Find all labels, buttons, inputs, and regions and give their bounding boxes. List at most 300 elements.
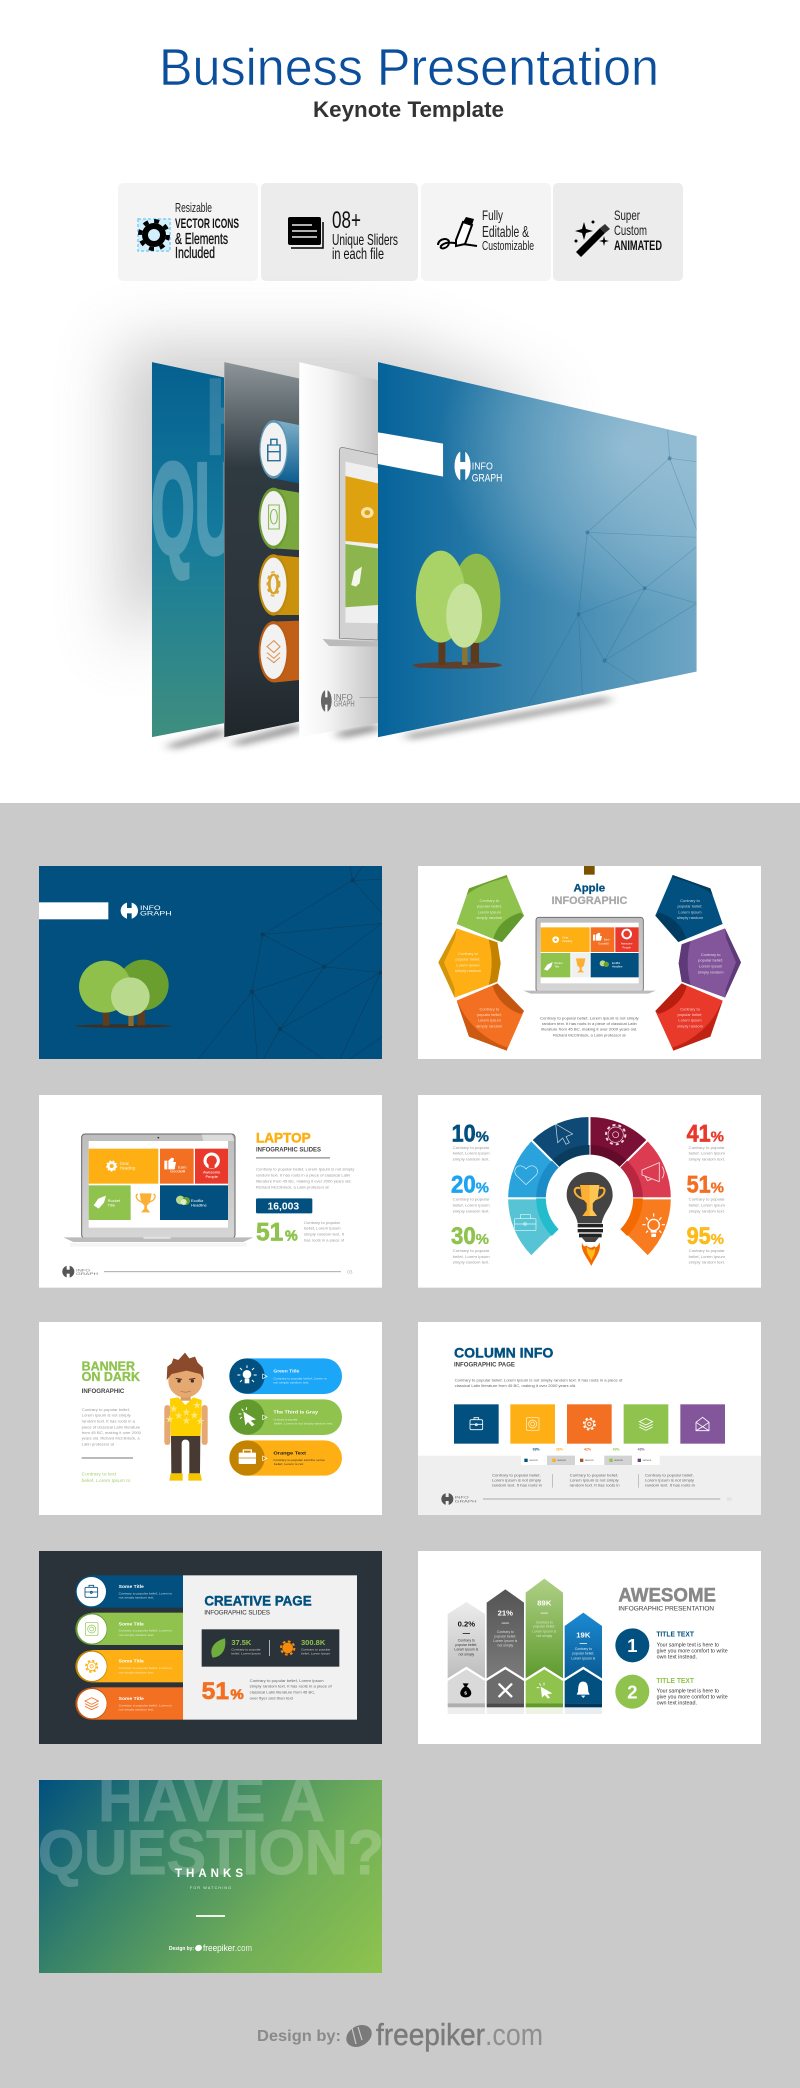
arrow column: grey: [448, 1602, 485, 1714]
credit: .com: [235, 1943, 252, 1954]
laptop: People: [623, 945, 631, 949]
text columns: Contrary to popular belief,: [645, 1474, 694, 1478]
feature tile: vector icons: [118, 183, 258, 281]
slide 3: laptop infographic: [39, 1095, 382, 1288]
text block: literature from 45 BC, making it over 2000 years old.: [541, 1028, 637, 1032]
character illustration: ★: [190, 1411, 199, 1422]
laptop: [523, 917, 656, 994]
subtitle: Keynote Template: [313, 97, 504, 122]
heading: BANNER: [82, 1359, 135, 1373]
text columns: Contrary to popular belief,: [570, 1474, 618, 1478]
banner: blue: Green Title: [273, 1369, 300, 1375]
arrow column: dark grey: [487, 1589, 524, 1714]
stat 10%: 10: [452, 1121, 476, 1148]
character illustration: ★: [165, 1415, 174, 1426]
feature tile: animated: Custom: [614, 222, 647, 238]
stat 51%: belief, Lorem Ipsum: [689, 1203, 725, 1207]
segment: purple: simply random: [698, 969, 724, 974]
page number: 03: [347, 1269, 353, 1274]
stat 51%: %: [711, 1180, 724, 1196]
slide 2: apple infographic: [418, 866, 761, 1059]
stat 51%: [202, 1678, 244, 1705]
row: green: [75, 1613, 183, 1645]
laptop: Heading: [120, 1165, 136, 1170]
banner: yellow: Contrary to popular and the some: [273, 1458, 325, 1462]
text block: [250, 1679, 333, 1700]
footer logo: [441, 1493, 477, 1505]
text block: [304, 1221, 344, 1242]
stat 30%: 30: [451, 1223, 476, 1250]
character illustration: [164, 1353, 208, 1481]
hero: stack of perspective slides: [151, 358, 697, 749]
icon: leaf logo: [342, 2021, 376, 2051]
credit: [169, 1943, 252, 1954]
arrow column: blue: 19K: [576, 1631, 591, 1640]
footer logo: GRAPH: [76, 1272, 99, 1276]
column: target: [510, 1404, 555, 1444]
gallery background: grey: [0, 803, 800, 2088]
arrow column: dark grey: not simply: [497, 1644, 513, 1648]
segment: green: [457, 875, 524, 942]
stat 95%: %: [711, 1232, 724, 1248]
slide 5: banner on dark: [39, 1322, 382, 1515]
arrow column: blue: popular belief,: [572, 1651, 594, 1655]
column: envelope: [680, 1404, 725, 1444]
heading: COLUMN INFO: [454, 1346, 554, 1361]
laptop: Awesome: [621, 942, 633, 946]
text block: Contrary to popular belief, Lorem Ipsum: [250, 1679, 324, 1683]
row: yellow: Some Title: [119, 1659, 144, 1665]
row: orange: Some Title: [119, 1696, 144, 1702]
item 1: give you more comfort to write: [657, 1649, 728, 1655]
arrow column: green: not simply: [536, 1634, 552, 1638]
stat 95%: 95: [687, 1223, 711, 1250]
feature tile: animated: [553, 183, 683, 281]
banner: yellow: [229, 1440, 342, 1476]
feature tile: fully editable: Editable &: [482, 224, 529, 241]
segment: navy: Contrary to: [680, 898, 701, 903]
stat box: 37.5K: [231, 1640, 251, 1647]
icon: magic wand: [574, 220, 610, 257]
row: orange: not simply random text.: [119, 1708, 155, 1712]
stat 51%: %: [230, 1686, 244, 1702]
laptop: Goodwill: [598, 941, 609, 945]
stat box: 300.8K: [301, 1640, 325, 1647]
footer logo: INFO: [455, 1496, 469, 1500]
footer: design credit: Design by:: [257, 2028, 341, 2045]
arrow column: dark grey: Lorem Ipsum is: [493, 1639, 517, 1643]
segment: navy: popular belief,: [677, 904, 703, 909]
segment: navy: [655, 875, 723, 942]
row: yellow: not simply random text.: [119, 1670, 155, 1674]
banner: green: [229, 1399, 342, 1435]
banner: yellow: belief, Lorem is not: [274, 1462, 304, 1466]
segment: navy: Lorem Ipsum: [678, 910, 702, 915]
laptop: EcoBiz: [191, 1198, 203, 1203]
item 1: Your sample text is here to: [657, 1643, 719, 1649]
laptop: Goodwill: [170, 1169, 185, 1174]
segment: green: Lorem Ipsum: [478, 910, 502, 915]
arrow column: dark grey: Contrary to: [497, 1630, 514, 1634]
slide 7: creative page: [39, 1551, 382, 1744]
footer logo: INFO: [76, 1268, 90, 1272]
stat 20%: %: [476, 1180, 489, 1196]
text block: belief, Lorem Ipsum: [304, 1227, 341, 1231]
slide: have a question (back): H: [207, 358, 252, 477]
network lines: [528, 430, 697, 705]
subheading: INFOGRAPHIC PRESENTATION: [618, 1605, 714, 1612]
laptop: EcoBiz: [612, 961, 621, 965]
text block: Contrary to popular belief, Lorem Ipsum is not simply: [256, 1168, 355, 1172]
laptop: Gear: [562, 936, 568, 940]
ground shadows: [168, 697, 608, 749]
stat 10%: Contrary to popular: [453, 1146, 490, 1150]
stat 20%: belief, Lorem Ipsum: [453, 1203, 490, 1207]
text block: [82, 1408, 141, 1446]
arrow column: green: popular belief,: [533, 1625, 555, 1629]
text block: piece of classical Latin literature: [82, 1425, 140, 1429]
column percentages: 93%: [533, 1447, 540, 1451]
text block: over flyer and then text: [250, 1696, 294, 1700]
row: blue: Contrary to popular belief, Lorem is: [119, 1591, 173, 1595]
banner: green: The Third is Gray: [273, 1410, 318, 1416]
feature tile: animated: ANIMATED: [614, 237, 662, 253]
text block: simply random text. It: [304, 1233, 344, 1237]
arrow column: grey: Lorem Ipsum is: [454, 1648, 478, 1652]
icon: stacked documents: [288, 217, 323, 248]
green note: Contrary to text: [82, 1472, 117, 1477]
laptop: Heading: [562, 939, 573, 943]
banner: blue: [229, 1358, 342, 1394]
legend: [521, 1456, 660, 1465]
arrow column: dark grey: 21%: [498, 1609, 513, 1618]
subheading: INFOGRAPHIC PAGE: [454, 1362, 515, 1368]
stat 41%: [687, 1121, 726, 1162]
icon: sun: [281, 1641, 294, 1655]
stat 30%: simply random text.: [453, 1261, 490, 1265]
laptop: Awesome: [203, 1170, 221, 1175]
heading: AWESOME: [618, 1586, 716, 1607]
icon: trophy: [136, 1193, 155, 1212]
character illustration: ★: [169, 1404, 178, 1415]
banner: green: belief, Lorem is not simply random text.: [274, 1421, 334, 1425]
background words: HAVE A: [98, 1765, 325, 1835]
network lines: [198, 866, 383, 1059]
footer logo: GRAPH: [455, 1499, 477, 1503]
green note: belief, Lorem Ipsum to: [82, 1478, 131, 1483]
slide: laptop: INFO: [334, 693, 353, 702]
for watching: FOR WATCHING: [190, 1886, 231, 1890]
row: blue: not simply random text.: [119, 1596, 155, 1600]
text block: Contrary to popular: [304, 1221, 341, 1225]
item 2: [615, 1675, 728, 1709]
legend: SERVICE: [614, 1460, 624, 1462]
text columns: random text. It has roots in: [570, 1483, 620, 1487]
segment: orange: [457, 983, 524, 1051]
logo: GRAPH: [140, 912, 172, 918]
laptop: Headline: [612, 965, 623, 969]
stat 41%: Contrary to popular: [689, 1146, 726, 1150]
page background: white top: [0, 0, 800, 803]
row: orange: Contrary to popular belief, Lorem is: [119, 1703, 173, 1707]
stat 30%: Contrary to popular: [453, 1249, 490, 1253]
heading: LAPTOP: [256, 1129, 311, 1145]
column: layers: [624, 1404, 668, 1444]
stat 20%: Contrary to popular: [453, 1198, 490, 1202]
slide 1: cover: [39, 866, 383, 1059]
stat 10%: %: [476, 1130, 489, 1146]
semi-ring segments: [507, 1116, 672, 1257]
text block: [455, 1378, 623, 1388]
trees: [412, 551, 502, 669]
right panel: [183, 1575, 357, 1720]
icon: pen with scribble: [438, 217, 477, 248]
row: yellow: [75, 1650, 183, 1682]
item 1: TITLE TEXT: [656, 1632, 695, 1639]
icon: gear: [606, 1125, 625, 1144]
stat box: Contrary to popular: [301, 1647, 330, 1651]
banner: green: Contrary to popular: [273, 1417, 298, 1421]
hero: soft shadow behind slide stack: [120, 345, 560, 650]
arrow column: green: Contrary to: [536, 1620, 553, 1624]
arrow column: grey: not simply: [458, 1652, 474, 1656]
stat box: Contrary to popular: [231, 1647, 261, 1651]
laptop: Rocket: [554, 961, 563, 965]
text block: random text. It has roots in a piece of classical Latin: [256, 1173, 350, 1177]
stat 30%: belief, Lorem Ipsum: [453, 1255, 490, 1259]
text block: [540, 1016, 639, 1037]
stat box: belief, Lorem Ipsum: [231, 1652, 261, 1656]
credit: Design by:: [169, 1946, 194, 1952]
legend: SERVICE: [529, 1460, 539, 1462]
stat 10%: [452, 1121, 490, 1162]
laptop: Earn: [178, 1164, 187, 1169]
text block: Contrary to popular belief, Lorem Ipsum is not simply: [540, 1016, 639, 1020]
icon: gear in dashed square: [138, 219, 170, 251]
subheading: INFOGRAPHIC SLIDES: [256, 1147, 321, 1154]
row: blue: Some Title: [119, 1584, 144, 1590]
arrow column: green: 89K: [537, 1599, 552, 1608]
column percentages: 43%: [613, 1447, 620, 1451]
segment: red: Contrary to: [680, 1006, 701, 1011]
segment: red: popular belief,: [677, 1012, 703, 1017]
legend: SERVICE: [643, 1460, 652, 1462]
segment: purple: Lorem Ipsum: [699, 964, 723, 969]
slide: have a question (back): [152, 362, 224, 738]
stat 95%: simply random text.: [689, 1261, 725, 1265]
stat 51%: simply random text.: [689, 1209, 725, 1213]
footer: design credit: .com: [485, 2017, 543, 2052]
credit: freepiker: [203, 1943, 235, 1954]
text block: Contrary to popular belief,: [82, 1408, 130, 1412]
column: briefcase: [454, 1404, 499, 1444]
arrow column: blue: Lorem Ipsum is: [571, 1656, 595, 1660]
text block: Richard McClintock, a Latin professor at: [553, 1033, 626, 1037]
heading: CREATIVE PAGE: [204, 1593, 312, 1608]
stat 41%: %: [711, 1130, 724, 1146]
segment: green: simply random: [476, 915, 503, 920]
arrow column: grey: 0.2%: [458, 1620, 475, 1629]
icon: megaphone: [642, 1163, 664, 1182]
stat 10%: simply random text.: [453, 1158, 490, 1162]
stat 20%: [451, 1171, 490, 1213]
laptop: Title: [108, 1202, 116, 1207]
character illustration: ★: [196, 1416, 205, 1427]
feature tile: unique sliders: 08+: [332, 207, 361, 234]
thanks heading: THANKS: [175, 1868, 243, 1880]
segment: orange: Lorem Ipsum: [478, 1018, 502, 1023]
text block: random text. It has roots in a piece of classical Latin: [542, 1022, 637, 1026]
feature tile: vector icons: Resizable: [175, 200, 212, 215]
icon: briefcase: [514, 1215, 536, 1231]
segment: yellow: simply random: [455, 968, 482, 973]
stat 95%: Contrary to popular: [689, 1249, 726, 1253]
logo: [455, 450, 502, 484]
arrow column: blue: [565, 1613, 602, 1714]
white bar: [39, 902, 108, 919]
feature tile: vector icons: VECTOR ICONS: [175, 215, 239, 231]
slide: laptop: [299, 362, 378, 737]
column percentages: 26%: [556, 1448, 563, 1452]
feature tile: unique sliders: Unique Sliders: [332, 232, 398, 249]
slide: creative page: [224, 362, 299, 737]
segment: red: simply random: [677, 1023, 704, 1028]
segment: purple: Contrary to: [701, 952, 721, 957]
icon: tools: [499, 1684, 511, 1696]
arrow column: grey: popular belief,: [455, 1643, 477, 1647]
row: yellow: Contrary to popular belief, Lorem is: [119, 1666, 173, 1670]
text columns: Contrary to popular belief,: [492, 1474, 541, 1478]
row: blue: [75, 1575, 183, 1608]
slide: laptop: GRAPH: [334, 699, 355, 708]
stat 51%: 51: [687, 1171, 711, 1198]
stat 95%: [687, 1223, 726, 1265]
stat 41%: simply random text.: [689, 1158, 725, 1162]
arrow column: grey: Contrary to: [458, 1639, 475, 1643]
column percentages: [533, 1447, 645, 1452]
stat 51%: [256, 1219, 298, 1247]
heading: [82, 1359, 141, 1384]
white bar: [378, 432, 443, 477]
slide 2: apple infographic: INFOGRAPHIC: [552, 895, 627, 907]
arrow column: blue: Contrary to: [575, 1647, 592, 1651]
text block: literature from 45 BC, making it over 2000 years old.: [256, 1179, 352, 1183]
feature tile: vector icons: Included: [175, 245, 215, 262]
text columns: Lorem Ipsum is not simply: [645, 1479, 694, 1483]
slide 9: thanks: [38, 1765, 384, 1973]
logo: INFO: [140, 906, 161, 912]
stat 51%: %: [285, 1229, 298, 1245]
text block: simply random text. It has roots in a piece of: [250, 1685, 333, 1689]
laptop: Title: [554, 964, 560, 968]
logo: INFO: [472, 461, 493, 472]
laptop: Earn: [604, 938, 610, 942]
heading: ON DARK: [82, 1370, 141, 1384]
stat 30%: [451, 1223, 490, 1265]
segment: navy: simply random: [677, 915, 704, 920]
legend: SERVICE: [557, 1460, 567, 1462]
item 2: 2: [627, 1681, 638, 1702]
text columns: random text. It has roots in: [645, 1483, 695, 1487]
segment: orange: popular belief,: [477, 1012, 502, 1017]
stat 20%: 20: [451, 1171, 476, 1198]
icon: light bulb with trophy and flame: [567, 1172, 613, 1266]
segment: yellow: Lorem Ipsum: [456, 962, 480, 967]
text block: Lorem Ipsum is not simply: [82, 1414, 131, 1418]
logo: [121, 902, 172, 919]
segment: orange: Contrary to: [479, 1006, 500, 1011]
text block: Richard McClintock, a Latin professor at: [256, 1185, 329, 1189]
arrow column: dark grey: popular belief,: [494, 1634, 516, 1638]
stat 95%: belief, Lorem Ipsum: [689, 1255, 725, 1259]
segment: yellow: [438, 928, 501, 998]
banner: blue: Contrary to popular belief, Lorem is: [273, 1376, 327, 1380]
feature tile: vector icons: & Elements: [175, 231, 228, 248]
icon: money bag: $: [464, 1690, 467, 1696]
subheading: INFOGRAPHIC SLIDES: [204, 1609, 270, 1616]
character illustration: ★: [182, 1408, 191, 1419]
character illustration: ★: [174, 1411, 183, 1422]
slide 6: column info: [418, 1322, 761, 1515]
icon: bell: [577, 1682, 590, 1698]
item 2: Your sample text is here to: [657, 1689, 719, 1695]
icon: cursor: [556, 1124, 573, 1144]
stat 51%: [687, 1171, 726, 1213]
stat pill: [256, 1198, 312, 1213]
footer: design credit: freepiker: [376, 2017, 485, 2052]
text columns: [492, 1474, 695, 1488]
stat 10%: belief, Lorem Ipsum: [453, 1152, 490, 1156]
segment: purple: [679, 928, 741, 998]
text columns: random text. It has roots in: [492, 1483, 542, 1487]
text block: has roots in a piece of: [304, 1238, 344, 1242]
text block: random text. It has roots in a: [82, 1420, 136, 1424]
subheading: INFOGRAPHIC: [82, 1389, 125, 1395]
text block: years old. Richard McClintock, a: [82, 1437, 141, 1441]
text columns: Lorem Ipsum is not simply: [570, 1479, 619, 1483]
segment: yellow: popular belief,: [455, 957, 481, 962]
item 1: 1: [627, 1635, 638, 1656]
segment: red: [655, 983, 723, 1051]
trees: [75, 960, 172, 1028]
legend: SERVICE: [585, 1460, 594, 1462]
segment: purple: popular belief,: [698, 958, 723, 963]
stat 20%: simply random text.: [453, 1209, 490, 1213]
stat pill: 16,003: [268, 1202, 299, 1213]
arrow column: green: Lorem Ipsum is: [532, 1629, 556, 1633]
icon: cursor: [537, 1683, 552, 1699]
feature tile: unique sliders: [261, 183, 418, 281]
background words: [40, 1780, 381, 1887]
green note: [82, 1472, 131, 1483]
segment: green: Contrary to: [479, 898, 500, 903]
segment: orange: simply random: [476, 1023, 503, 1028]
feature tile: fully editable: Customizable: [482, 238, 534, 253]
stat box: [202, 1629, 339, 1667]
segment: green: popular belief,: [477, 904, 502, 909]
logo: GRAPH: [472, 471, 502, 484]
text block: classical Latin literature from 45 BC, making it over 2000 years old.: [455, 1384, 576, 1388]
laptop: Headline: [191, 1202, 208, 1207]
title: Business Presentation: [159, 39, 659, 97]
stat 51%: 51: [256, 1219, 283, 1247]
stat 41%: 41: [687, 1121, 711, 1148]
page number: 06: [727, 1497, 732, 1502]
character illustration: ★: [182, 1416, 191, 1427]
column percentages: 42%: [584, 1448, 591, 1452]
stat 30%: %: [476, 1232, 489, 1248]
feature tile: fully editable: Fully: [482, 207, 503, 223]
